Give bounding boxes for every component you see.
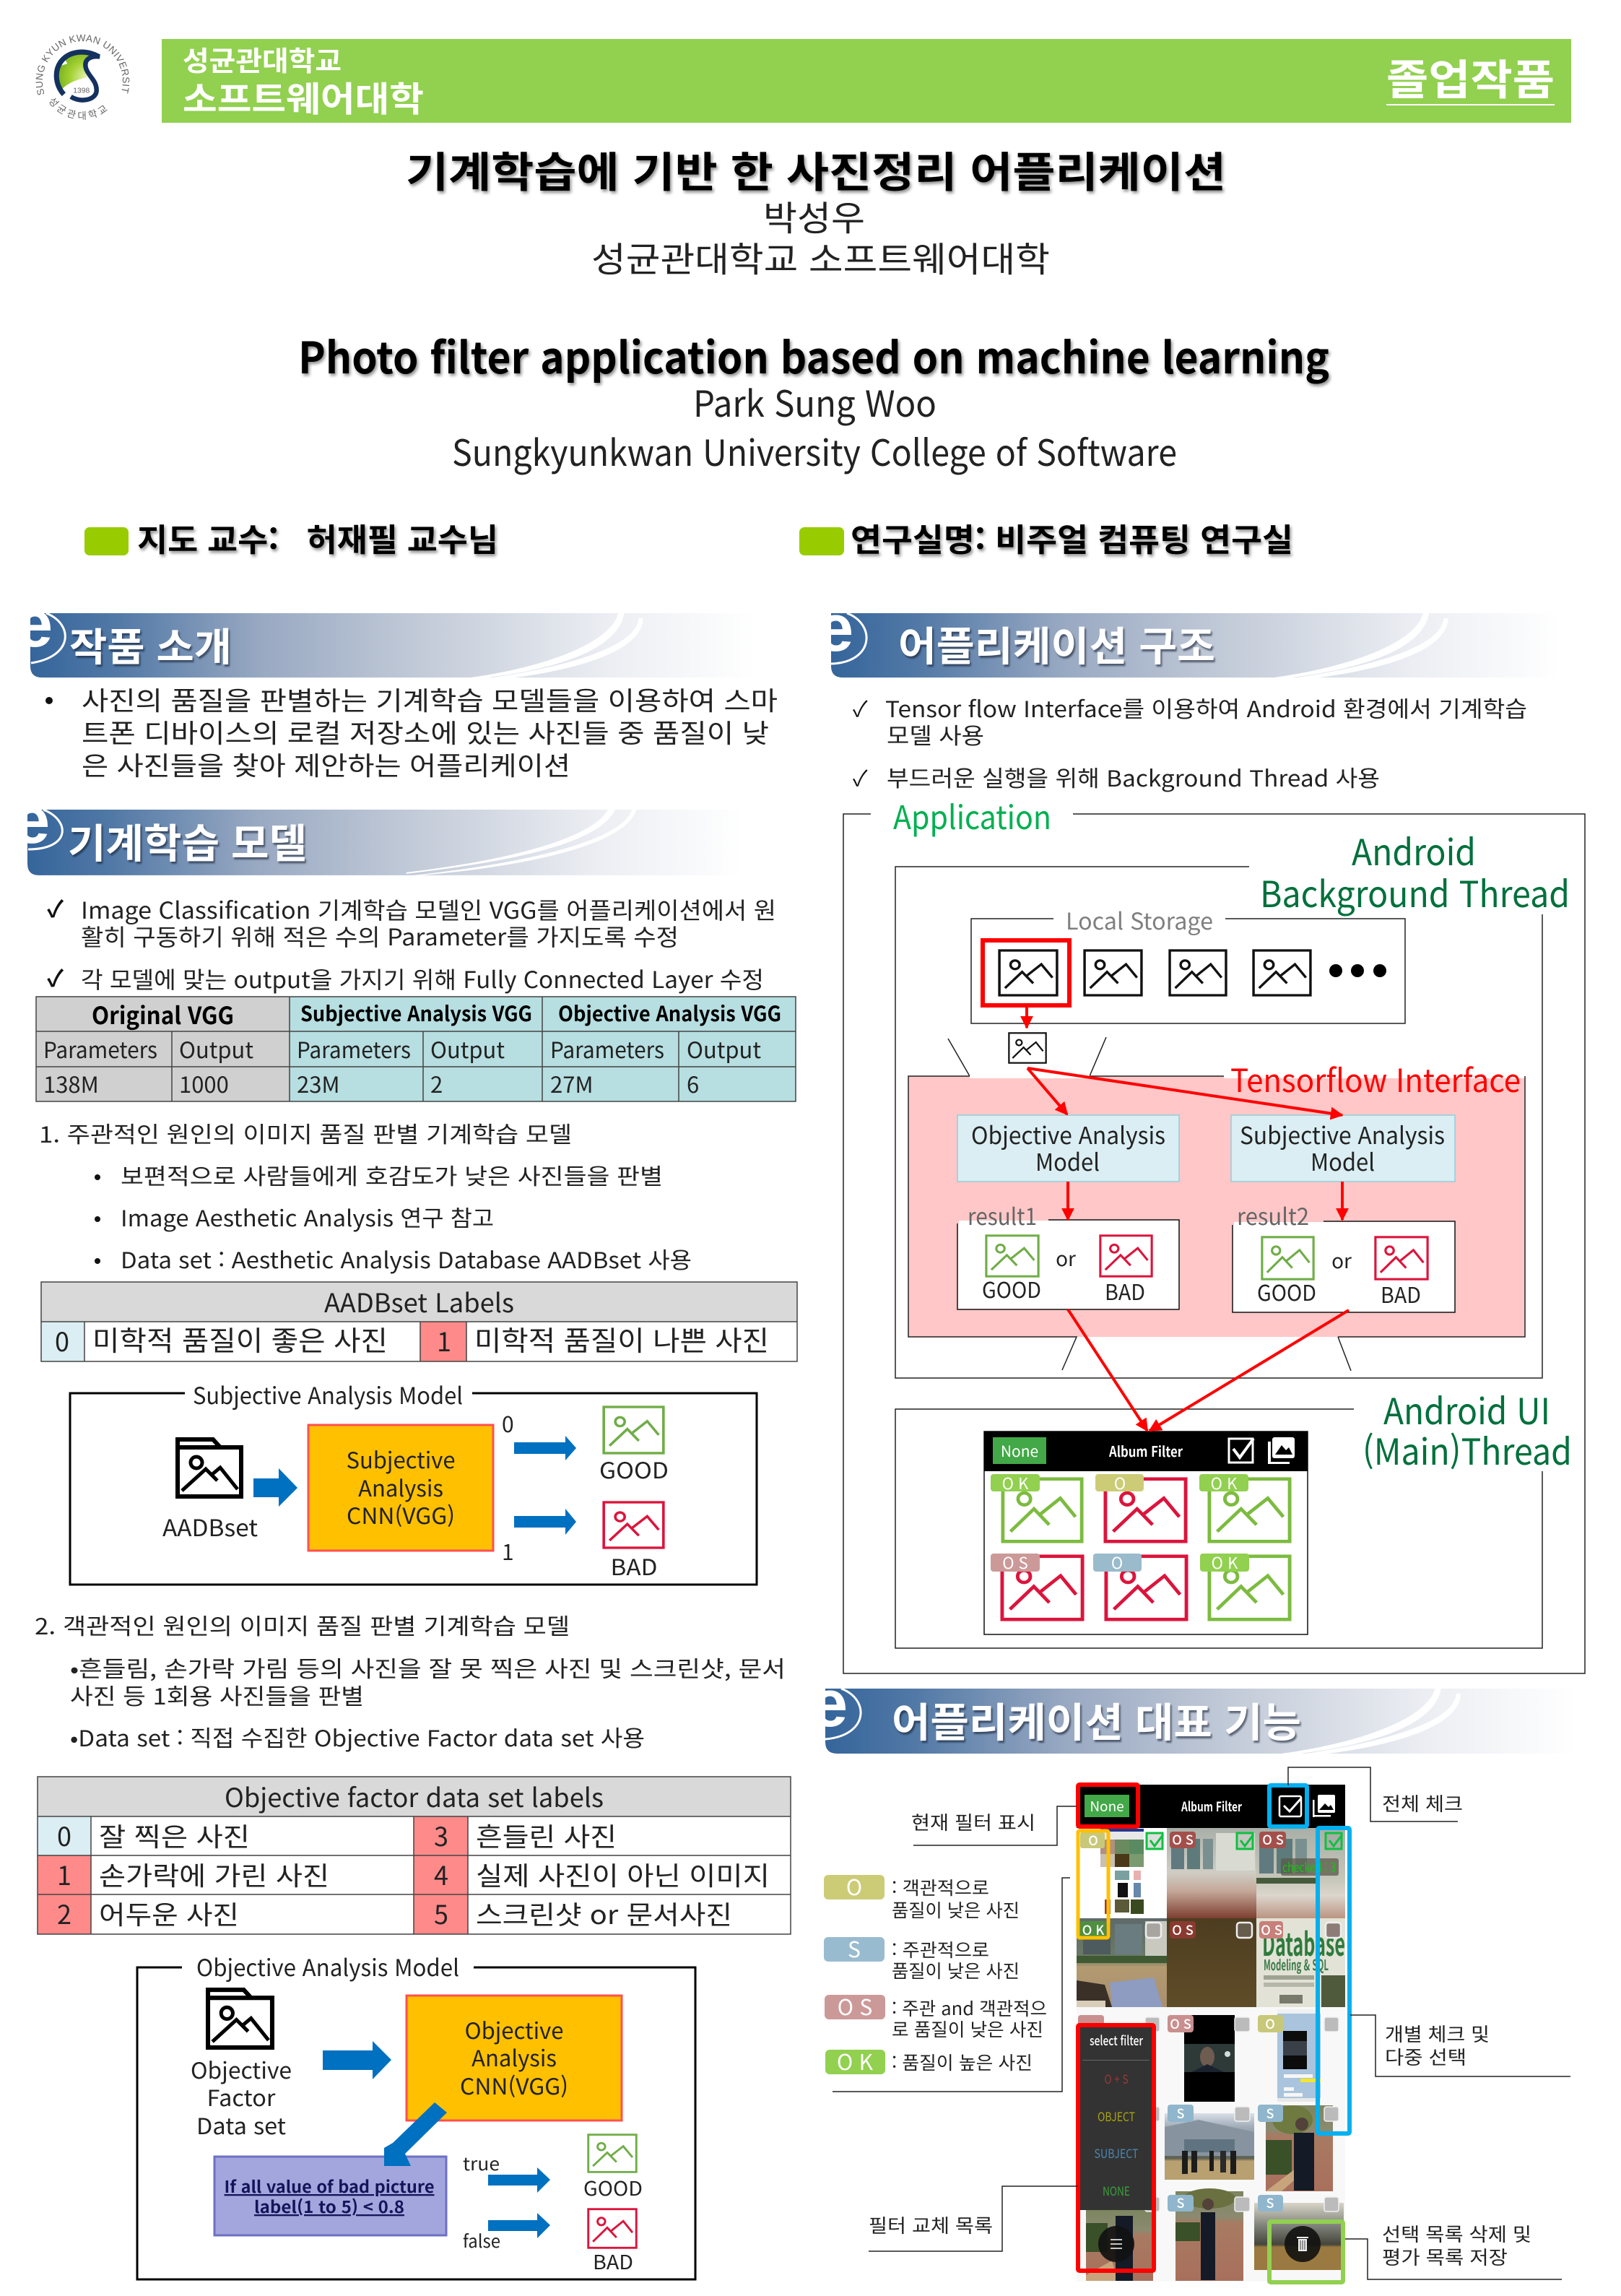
table: VGG comparison: 23M (297, 1067, 340, 1099)
callout: filter list: 필터 교체 목록 (869, 2211, 993, 2238)
arrow: output 1 (514, 1509, 576, 1535)
callout: individual check: 다중 선택 (1385, 2043, 1466, 2070)
legend: quality badges: : 주관적으로 (892, 1936, 989, 1962)
badges and checkboxes: S (1177, 2104, 1185, 2123)
photo: person with hand (1266, 2105, 1333, 2191)
title: English: Photo filter application based on machine learning (298, 324, 1329, 386)
university logo: 1398 (73, 87, 90, 95)
table: AADBset labels: 1 (437, 1322, 451, 1359)
filter drawer (1080, 2026, 1152, 2262)
filter drawer: NONE (1103, 2181, 1130, 2199)
table: VGG comparison: Output (687, 1032, 761, 1065)
badges and checkboxes: O S (1261, 1920, 1282, 1939)
callout: check all (1288, 1767, 1463, 1821)
diagram: subjective analysis model: 1 (502, 1535, 514, 1567)
block: subjective CNN (308, 1425, 493, 1551)
table: objective factor labels: 0 (57, 1816, 71, 1854)
panel heading: machine learning model: e (13, 784, 50, 857)
text block: architecture notes: 부드러운 실행을 위해 Background Thread 사용 (887, 761, 1380, 793)
text block: objective model notes: •흔들림, 손가락 가림 등의 사진을 잘 못 찍은 사진 및 스크린샷, 문서 (70, 1651, 786, 1684)
photo: person standing (1175, 2188, 1243, 2281)
condition box (214, 2157, 446, 2235)
callout: check all: 전체 체크 (1382, 1790, 1463, 1816)
text block: objective model notes: 사진 등 1회용 사진들을 판별 (70, 1678, 364, 1711)
table: VGG comparison: 2 (430, 1067, 443, 1099)
university logo: SUNG KYUN KWAN UNIVERSITY (36, 35, 130, 95)
lab line: 연구실명: 비주얼 컴퓨팅 연구실 (851, 514, 1293, 560)
icon: dataset folder (208, 1990, 272, 2048)
table: objective factor labels: 스크린샷 or 문서사진 (476, 1894, 732, 1932)
photo: blurred window, pale (1256, 1828, 1345, 1918)
legend: quality badges: : 품질이 높은 사진 (892, 2049, 1033, 2075)
arrows: data flow (1027, 1068, 1349, 1431)
affiliation: Korean: 성균관대학교 소프트웨어대학 (591, 231, 1050, 282)
table: objective factor labels: 5 (434, 1894, 448, 1932)
tensorflow interface region: Tensorflow Interface (1230, 1055, 1521, 1101)
result2 box: or (1331, 1246, 1352, 1275)
table: objective factor labels: 4 (434, 1855, 448, 1893)
text block: model notes: 각 모델에 맞는 output을 가지기 위해 Fully Connected Layer 수정 (81, 962, 764, 995)
table: objective factor labels: 1 (57, 1855, 71, 1893)
table: VGG comparison: Parameters (550, 1032, 664, 1065)
condition box: label(1 to 5) < 0.8 (254, 2193, 404, 2218)
panel heading: main features: 어플리케이션 대표 기능 (892, 1691, 1301, 1749)
panel heading: application architecture: 어플리케이션 구조 (898, 615, 1215, 673)
callout: delete and save: 선택 목록 삭제 및 (1382, 2220, 1531, 2247)
android background thread frame: Background Thread (1260, 866, 1570, 918)
app mock-up: O K (1212, 1551, 1238, 1574)
local storage group (971, 904, 1405, 1023)
legend: quality badges: 품질이 낮은 사진 (892, 1957, 1020, 1983)
block: objective CNN: CNN(VGG) (460, 2068, 568, 2101)
arrow: dataset to CNN (323, 2041, 391, 2079)
badges and checkboxes: O K (1082, 1920, 1104, 1939)
text block: objective model notes (35, 1608, 786, 1753)
app screenshot (1077, 1785, 1350, 2282)
diagram: objective analysis model: BAD (593, 2247, 633, 2275)
text block: subjective model notes (39, 1117, 692, 1275)
diagram: subjective analysis model: GOOD (599, 1452, 669, 1485)
photo: database book (1256, 1918, 1345, 2007)
icon: bad image (588, 2209, 636, 2248)
block: objective model (957, 1115, 1179, 1182)
diagram: objective analysis model: false (463, 2227, 500, 2253)
label: application: Application (893, 792, 1051, 839)
trash button (1285, 2226, 1321, 2262)
header: university name: 성균관대학교 (183, 39, 342, 79)
block: subjective model: Model (1311, 1143, 1375, 1178)
text block: introduction: 트폰 디바이스의 로컬 저장소에 있는 사진들 중 품질이 낮 (82, 713, 769, 750)
filter drawer: select filter (1090, 2031, 1143, 2050)
app mock-up: O K (1002, 1471, 1029, 1494)
badges and checkboxes: O S (1262, 1830, 1284, 1849)
diagram: application architecture (843, 792, 1585, 1673)
legend: quality badges: 품질이 낮은 사진 (892, 1897, 1020, 1923)
result1 box: BAD (1105, 1275, 1145, 1307)
photo: chat screenshot (1277, 2009, 1321, 2102)
top bar (1077, 1785, 1345, 1828)
text block: architecture notes: Tensor flow Interface를 이용하여 Android 환경에서 기계학습 (885, 691, 1527, 724)
text block: subjective model notes: Image Aesthetic Analysis 연구 참고 (121, 1200, 494, 1233)
table: VGG comparison: Parameters (43, 1032, 157, 1065)
app screenshot: checked : 3 (1282, 1858, 1336, 1876)
dataset label: Objective (191, 2053, 292, 2085)
icon: bad image (604, 1502, 664, 1548)
photo: room (1077, 1918, 1167, 2007)
dataset label (191, 2053, 292, 2141)
table: objective factor labels: 손가락에 가린 사진 (99, 1855, 329, 1893)
arrow: dataset to CNN (253, 1468, 297, 1507)
highlight: individual checks (1318, 1828, 1350, 2133)
dataset label: Data set (196, 2108, 286, 2141)
app mock-up: Album Filter (1108, 1440, 1183, 1461)
callout: individual check (1350, 2015, 1570, 2076)
university logo: 성균관대학교 (49, 98, 108, 120)
affiliation: English: Sungkyunkwan University College of Software (452, 425, 1177, 477)
panel heading: main features (825, 1689, 1512, 1754)
app mock-up: O S (1002, 1551, 1028, 1574)
panel heading: machine learning model: 기계학습 모델 (68, 812, 307, 870)
table: VGG comparison: Objective Analysis VGG (558, 997, 781, 1028)
table: AADBset labels: AADBset Labels (324, 1283, 514, 1320)
table: objective factor labels: 3 (434, 1816, 448, 1854)
text block: architecture notes (853, 691, 1527, 793)
photo grid (1077, 1828, 1167, 1918)
text block: introduction (45, 680, 778, 783)
block: subjective CNN: CNN(VGG) (347, 1498, 455, 1530)
panel heading: main features: e (811, 1667, 848, 1741)
panel heading: machine learning model (27, 810, 682, 875)
block: subjective CNN: Analysis (358, 1470, 443, 1503)
block: objective CNN: Objective (465, 2013, 563, 2045)
result1 box (956, 1199, 1179, 1309)
block: subjective model (1231, 1115, 1455, 1182)
badges and checkboxes (1078, 1830, 1342, 2212)
header: college name: 소프트웨어대학 (183, 71, 424, 121)
text block: architecture notes: ✓ (853, 761, 868, 792)
callout: delete and save (1345, 2220, 1562, 2279)
block: objective CNN: Analysis (471, 2040, 557, 2073)
legend: quality badges: O (846, 1870, 862, 1902)
table: objective factor labels: 흔들린 사진 (476, 1816, 617, 1854)
result2 box: result2 (1237, 1199, 1309, 1232)
text block: model notes: ✓ (47, 891, 64, 924)
author: Korean: 박성우 (763, 190, 865, 241)
table: VGG comparison: Parameters (297, 1032, 411, 1065)
highlight: current filter (1078, 1785, 1138, 1827)
result1 box: result1 (968, 1199, 1037, 1232)
block: subjective model: Subjective Analysis (1240, 1117, 1445, 1151)
photo: campus jump (1254, 2203, 1344, 2270)
text block: model notes (47, 891, 776, 995)
app mock-up (984, 1431, 1308, 1634)
table: AADBset labels: 0 (55, 1322, 69, 1359)
table: objective factor labels: 어두운 사진 (99, 1894, 239, 1932)
table: AADBset labels: 미학적 품질이 좋은 사진 (92, 1319, 388, 1359)
callout: filter list (869, 2186, 1078, 2251)
result1 box: GOOD (982, 1273, 1041, 1304)
legend: quality badges: 로 품질이 낮은 사진 (892, 2016, 1043, 2042)
panel heading: application architecture: e (817, 592, 853, 665)
text block: introduction: 은 사진들을 찾아 제안하는 어플리케이션 (82, 745, 570, 783)
table: VGG comparison: Output (179, 1032, 253, 1065)
diagram: subjective analysis model: AADBset (162, 1510, 258, 1543)
text block: model notes: ✓ (47, 961, 64, 994)
table: VGG comparison: 6 (687, 1067, 699, 1099)
panel heading: project introduction: e (16, 587, 53, 661)
block: objective model: Objective Analysis (971, 1117, 1165, 1151)
panel heading: project introduction (30, 613, 693, 677)
checked count (1281, 1858, 1339, 1876)
table: VGG comparison: 1000 (179, 1067, 229, 1099)
highlight: check all (1269, 1785, 1307, 1827)
filter drawer: O + S (1105, 2069, 1128, 2087)
legend: quality badges: O S (838, 1990, 872, 2022)
icon: dataset folder (178, 1439, 241, 1496)
callout: individual check: 개별 체크 및 (1385, 2020, 1490, 2047)
app mock-up: O (1114, 1471, 1126, 1494)
table: VGG comparison: 27M (550, 1067, 594, 1099)
diagram: objective analysis model: GOOD (583, 2173, 643, 2201)
university logo (36, 35, 130, 120)
callout: delete and save: 평가 목록 저장 (1382, 2243, 1508, 2270)
legend: quality badges: : 주관 and 객관적으 (892, 1995, 1047, 2021)
highlight: delete and save (1269, 2222, 1343, 2282)
filter drawer: SUBJECT (1095, 2144, 1138, 2162)
diagram: subjective analysis model: Subjective Analysis Model (193, 1378, 463, 1411)
icon: selected image (1009, 1007, 1046, 1063)
photo: campus group (1165, 2113, 1254, 2180)
callout: current filter: 현재 필터 표시 (911, 1808, 1035, 1835)
panel heading: project introduction: 작품 소개 (69, 615, 232, 672)
diagram: objective analysis model: Objective Analysis Model (196, 1950, 459, 1983)
table: VGG comparison: Original VGG (92, 997, 234, 1031)
text block: subjective model notes: Data set : Aesthetic Analysis Database AADBset 사용 (121, 1242, 692, 1275)
table: AADBset labels: 미학적 품질이 나쁜 사진 (474, 1319, 769, 1359)
table: objective factor labels: 실제 사진이 아닌 이미지 (476, 1855, 770, 1893)
result1 box: or (1056, 1244, 1076, 1273)
photo: blurred window, red (1167, 1828, 1256, 1918)
legend: quality badges: : 객관적으로 (892, 1874, 989, 1900)
app mock-up: None (1001, 1440, 1038, 1462)
badges and checkboxes: S (1177, 2193, 1185, 2212)
text block: architecture notes: 모델 사용 (887, 718, 984, 750)
local storage group: Local Storage (1066, 904, 1213, 937)
app screenshot: Album Filter (1181, 1797, 1242, 1816)
photo: phone portrait (1184, 2015, 1235, 2102)
table: objective factor labels (38, 1777, 791, 1934)
table: VGG comparison: 138M (43, 1067, 99, 1099)
panel heading: application architecture (831, 613, 1498, 677)
badges and checkboxes: O S (1170, 2014, 1191, 2033)
header bar (162, 39, 1571, 123)
result2 box: BAD (1381, 1278, 1421, 1309)
text block: subjective model notes: 보편적으로 사람들에게 호감도가 낮은 사진들을 판별 (121, 1158, 663, 1191)
text block: architecture notes: ✓ (853, 691, 868, 723)
legend: quality badges: O K (837, 2045, 874, 2076)
highlight: filter list (1078, 2025, 1154, 2271)
result2 box (1231, 1199, 1455, 1312)
legend: quality badges (824, 1870, 1070, 2092)
badges and checkboxes: O S (1172, 1830, 1194, 1849)
app mock-up: O (1111, 1551, 1123, 1574)
header: graduation work label: 졸업작품 (1386, 46, 1555, 107)
diagram: objective analysis model: true (463, 2150, 500, 2176)
diagram: subjective analysis model: 0 (502, 1407, 514, 1439)
table: objective factor labels: Objective factor data set labels (225, 1777, 604, 1815)
badges and checkboxes: S (1266, 2193, 1274, 2212)
tensorflow interface region (908, 1037, 1526, 1371)
app screenshot: None (1090, 1796, 1124, 1816)
table: objective factor labels: 잘 찍은 사진 (99, 1816, 250, 1854)
table: VGG comparison: Subjective Analysis VGG (300, 997, 532, 1028)
app mock-up: O K (1211, 1471, 1238, 1494)
legend: quality badges: S (848, 1932, 861, 1964)
badges and checkboxes: O (1088, 1831, 1098, 1850)
photo: database book: Modeling & SQL (1264, 1954, 1329, 1975)
photo: database book: Database (1262, 1919, 1345, 1965)
android UI thread frame (895, 1383, 1572, 1648)
text block: subjective model notes: 1. 주관적인 원인의 이미지 품질 판별 기계학습 모델 (39, 1117, 572, 1149)
arrow: true (488, 2167, 550, 2193)
arrow: output 0 (514, 1436, 576, 1460)
badges and checkboxes: O S (1172, 1920, 1194, 1939)
arrow: false (488, 2213, 550, 2238)
title: Korean: 기계학습에 기반 한 사진정리 어플리케이션 (406, 139, 1226, 199)
table: AADBset labels (41, 1282, 797, 1361)
table: VGG comparison (36, 997, 796, 1101)
result2 box: GOOD (1257, 1275, 1316, 1307)
condition box: If all value of bad picture (224, 2173, 435, 2198)
diagram: subjective analysis model: BAD (611, 1549, 657, 1582)
icon: good image (604, 1407, 664, 1453)
table: VGG comparison: Output (430, 1032, 505, 1065)
block: subjective CNN: Subjective (346, 1442, 456, 1475)
badges and checkboxes: O (1265, 2014, 1275, 2033)
author: English: Park Sung Woo (693, 376, 936, 428)
dataset label: Factor (207, 2080, 277, 2113)
block: objective model: Model (1035, 1143, 1100, 1178)
arrow: CNN to condition (384, 2102, 447, 2166)
text block: objective model notes: 2. 객관적인 원인의 이미지 품질 판별 기계학습 모델 (35, 1608, 570, 1641)
android background thread frame (895, 824, 1570, 1378)
text block: introduction: 사진의 품질을 판별하는 기계학습 모델들을 이용하여 스마 (82, 680, 778, 718)
text block: model notes: Image Classification 기계학습 모델인 VGG를 어플리케이션에서 원 (81, 893, 776, 926)
diagram: objective analysis model (137, 1950, 695, 2279)
diagram: subjective analysis model (70, 1378, 757, 1585)
photo: person, left column (1086, 2210, 1153, 2281)
block: objective CNN (407, 1996, 622, 2120)
advisor line: 지도 교수: 허재필 교수님 (137, 514, 498, 560)
android UI thread frame: (Main)Thread (1363, 1424, 1572, 1476)
badges and checkboxes: S (1266, 2104, 1274, 2123)
text block: model notes: 활히 구동하기 위해 적은 수의 Parameter를 가지도록 수정 (81, 919, 679, 953)
filter drawer: OBJECT (1098, 2107, 1135, 2125)
text block: objective model notes: •Data set : 직접 수집한 Objective Factor data set 사용 (70, 1720, 645, 1753)
highlight: objective badge (1078, 1831, 1108, 1938)
android UI thread frame: Android UI (1383, 1383, 1550, 1435)
android background thread frame: Android (1352, 824, 1476, 876)
callout: current filter (911, 1806, 1077, 1845)
table: objective factor labels: 2 (57, 1894, 71, 1932)
icon: good image (588, 2135, 636, 2172)
